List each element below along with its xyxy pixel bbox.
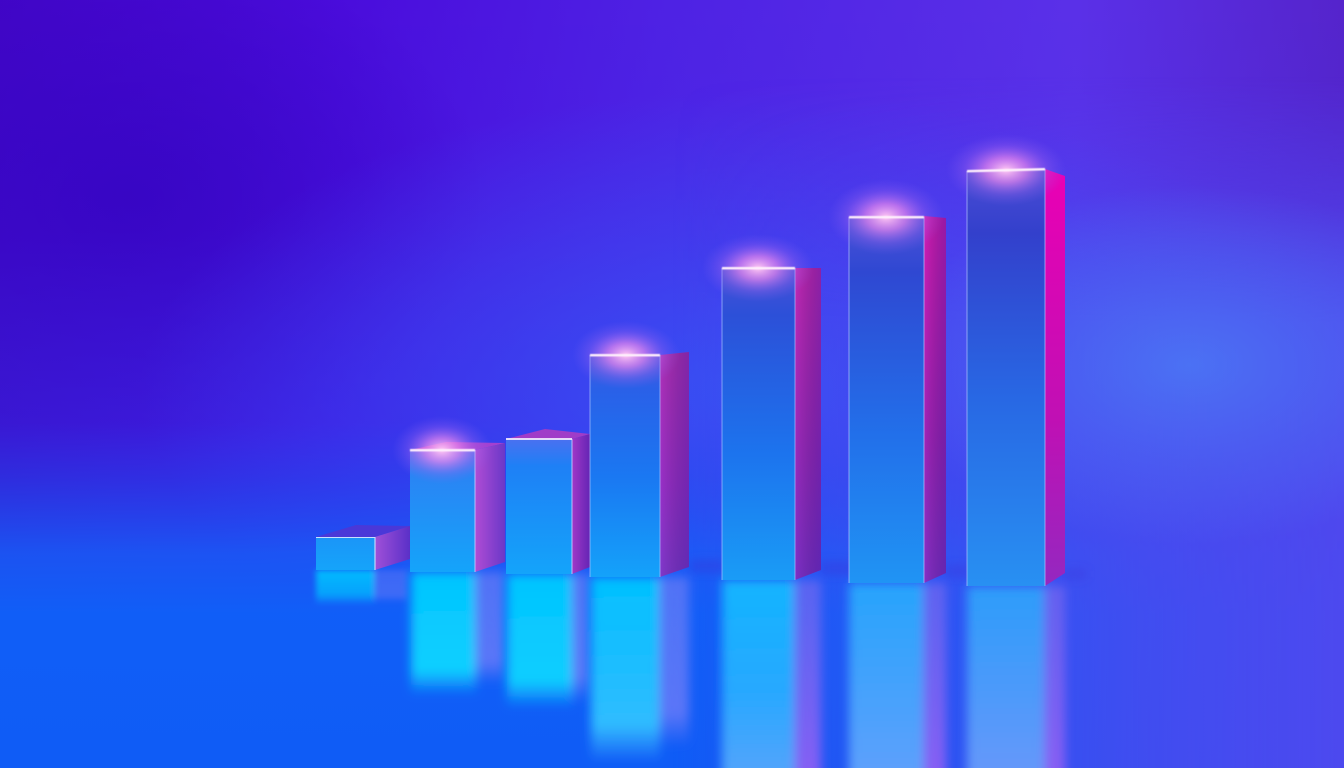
reflection: bar 7 (967, 586, 1065, 768)
bar 2 (410, 442, 505, 572)
bar 3 (506, 429, 590, 574)
floor contact shadows (690, 560, 1086, 578)
reflection: bar 3 (507, 574, 589, 708)
bar 4 (590, 352, 689, 577)
glow: bar 2 (392, 416, 492, 484)
glow: bar 5 (702, 234, 814, 302)
reflection: bar 5 (722, 580, 821, 768)
reflection: bar 1 (316, 570, 407, 605)
reflections on floor (316, 570, 1065, 768)
glow: bar 7 (946, 134, 1066, 206)
bar 6 (849, 216, 946, 583)
bar 5 (722, 268, 821, 580)
glow: bar 4 (572, 321, 680, 389)
bar 7 (967, 169, 1065, 586)
reflection: bar 6 (849, 583, 946, 768)
glowing bar tops (392, 134, 1066, 484)
reflection: bar 2 (411, 572, 504, 694)
bar 1 (316, 525, 410, 570)
reflection: bar 4 (591, 577, 689, 762)
glow: bar 6 (828, 179, 944, 255)
